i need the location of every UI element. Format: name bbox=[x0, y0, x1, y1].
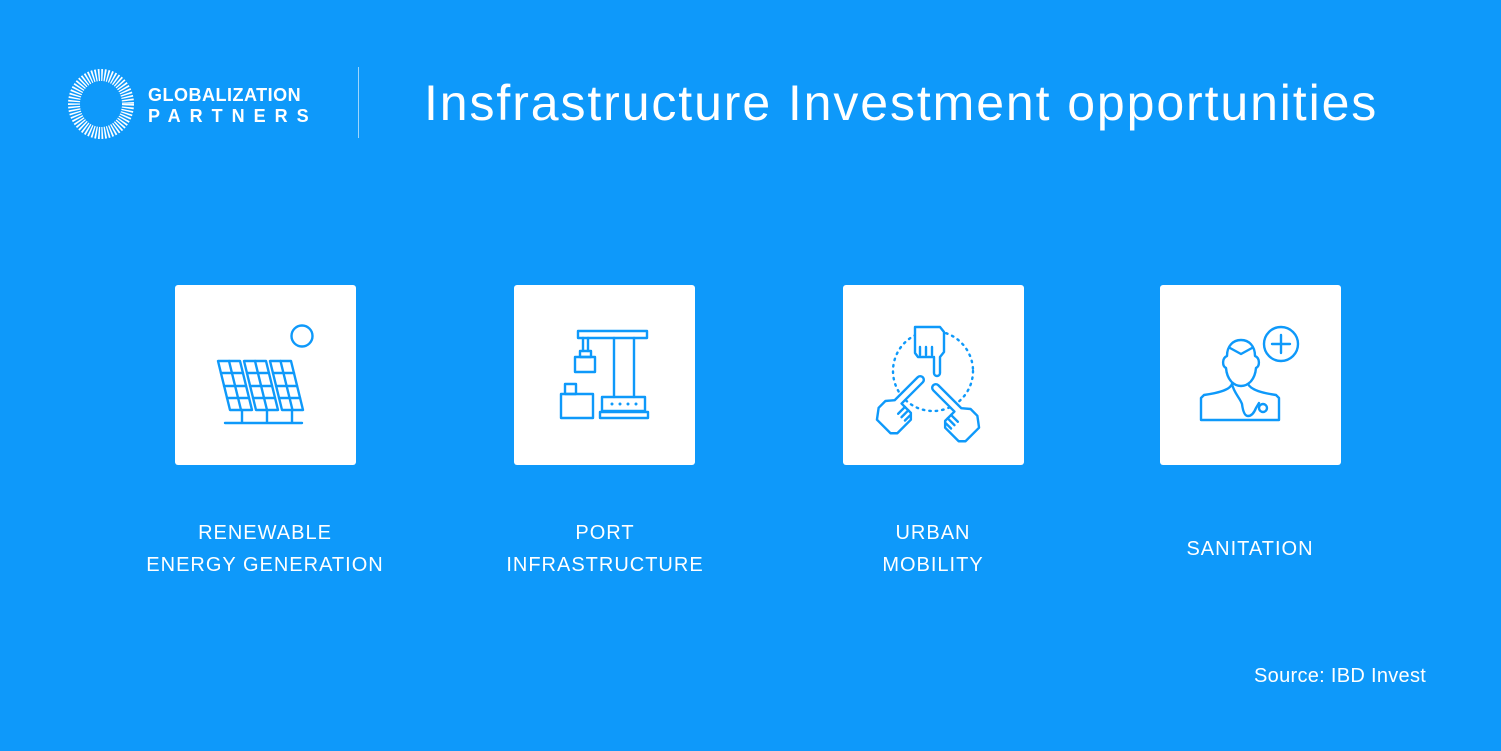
icon: sanitation person bbox=[1201, 327, 1298, 420]
panel: urban bbox=[843, 285, 1024, 465]
label: renewable: ENERGY GENERATION bbox=[146, 554, 384, 576]
panel: sanitation bbox=[1160, 285, 1341, 465]
label: port: PORT bbox=[575, 522, 635, 544]
title: Insfrastructure Investment opportunities bbox=[424, 75, 1378, 131]
icon: port crane bbox=[561, 331, 648, 418]
icon: solar panels bbox=[218, 326, 312, 423]
label: urban: MOBILITY bbox=[882, 554, 984, 576]
label: urban bbox=[882, 522, 984, 576]
label: port: INFRASTRUCTURE bbox=[506, 554, 704, 576]
label: sanitation: SANITATION bbox=[1186, 538, 1314, 560]
label: port bbox=[506, 522, 704, 576]
label: renewable: RENEWABLE bbox=[198, 522, 332, 544]
panel: renewable bbox=[175, 285, 356, 465]
logo text bbox=[148, 85, 318, 126]
label: renewable bbox=[146, 522, 384, 576]
label: urban: URBAN bbox=[895, 522, 970, 544]
logo bbox=[68, 69, 318, 139]
icon: urban mobility hands bbox=[872, 327, 984, 445]
icon: logo ring bbox=[68, 69, 134, 139]
panel: port bbox=[514, 285, 695, 465]
logo text: GLOBALIZATION bbox=[148, 85, 301, 105]
logo text: PARTNERS bbox=[148, 106, 318, 126]
source: Source: IBD Invest bbox=[1254, 665, 1426, 687]
